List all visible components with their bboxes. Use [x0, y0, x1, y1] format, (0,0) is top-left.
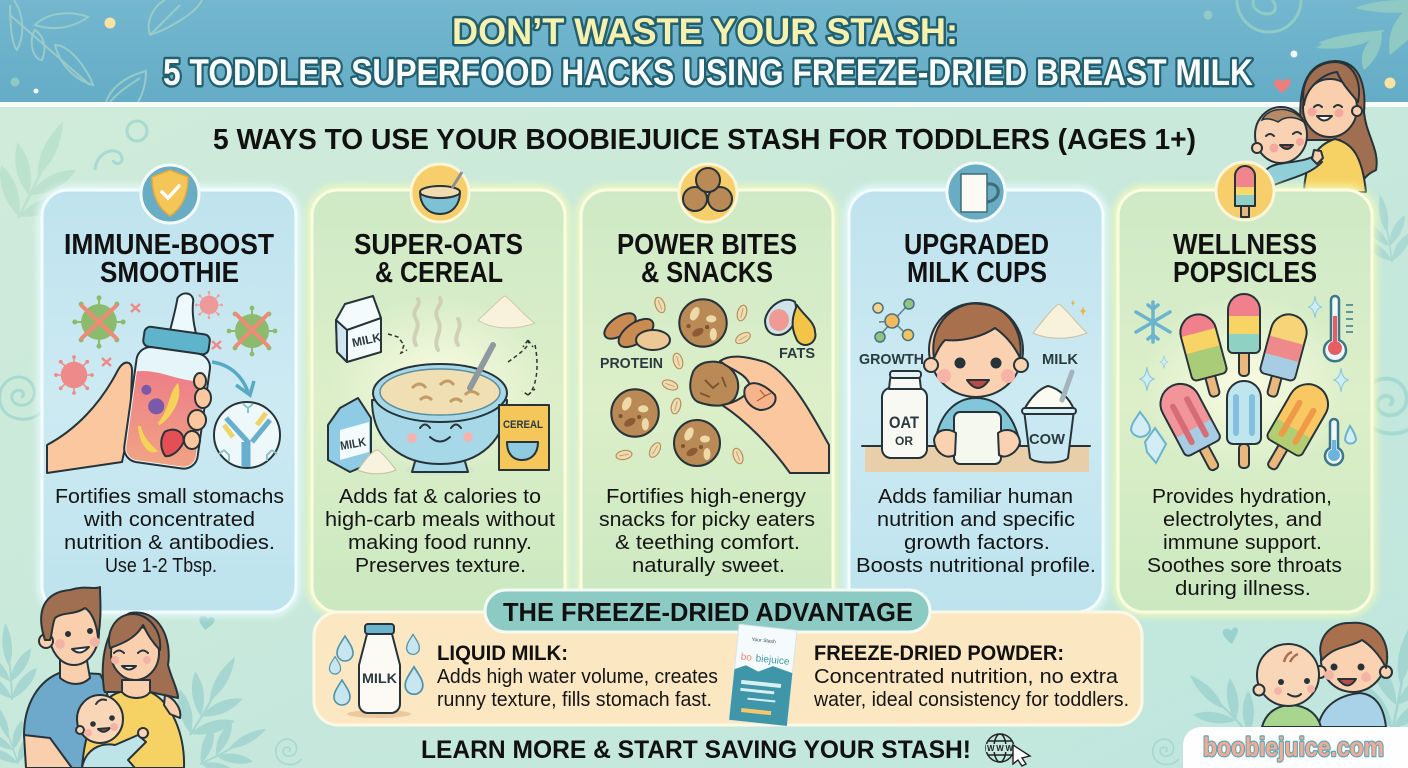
illustration: popsicles: [1131, 294, 1356, 479]
description: Fortifies high-energy: [606, 486, 806, 508]
liquid milk text: [437, 642, 718, 711]
description: Preserves texture.: [355, 555, 526, 577]
icon: shield: [141, 165, 199, 223]
heading: POPSICLES: [1173, 257, 1317, 289]
description: [325, 486, 555, 577]
heading: IMMUNE-BOOST: [64, 229, 274, 261]
heading: [354, 229, 523, 289]
description: electrolytes, and: [1163, 509, 1322, 531]
subheading: 5 WAYS TO USE YOUR BOOBIEJUICE STASH FOR TODDLERS (AGES 1+): [213, 124, 1196, 156]
heading pill: THE FREEZE-DRIED ADVANTAGE: [503, 597, 913, 627]
description: snacks for picky eaters: [599, 509, 815, 531]
icon: oat bowl: [411, 164, 469, 222]
heading: & SNACKS: [641, 257, 773, 289]
panel: power bites and snacks: [581, 164, 833, 612]
description: growth factors.: [904, 532, 1050, 554]
icon: globe with cursor: [986, 734, 1030, 766]
illustration: toddler with milk cup: OR: [895, 434, 913, 448]
description: Adds familiar human: [878, 486, 1073, 508]
product pouch: [729, 624, 797, 726]
product pouch: Your Stash: [751, 637, 776, 645]
panel: upgraded milk cups: [849, 163, 1103, 612]
illustration: toddler with milk cup: OAT: [889, 413, 920, 432]
freeze-dried powder text: FREEZE-DRIED POWDER:: [814, 642, 1064, 665]
icon: milk mug: [947, 163, 1005, 221]
heading: WELLNESS: [1173, 229, 1317, 261]
illustration: power bites: FATS: [779, 345, 815, 362]
illustration: toddler with milk cup: GROWTH: [859, 351, 924, 368]
description: [1147, 486, 1342, 600]
illustration: mother and baby: [1252, 61, 1377, 192]
description: & teething comfort.: [615, 532, 800, 554]
icon: milk bottle: [329, 624, 423, 718]
header banner: [0, 0, 1408, 107]
panel: super-oats and cereal: [312, 164, 565, 612]
heading: POWER BITES: [617, 229, 797, 261]
freeze-dried powder text: water, ideal consistency for toddlers.: [813, 689, 1129, 711]
liquid milk text: runny texture, fills stomach fast.: [437, 689, 712, 711]
description: during illness.: [1175, 578, 1311, 600]
freeze-dried powder text: Concentrated nutrition, no extra: [814, 666, 1119, 688]
description: [856, 486, 1096, 577]
icon: popsicle: [1216, 162, 1274, 220]
description: immune support.: [1163, 532, 1322, 554]
website link: [1183, 727, 1408, 768]
heading: MILK CUPS: [907, 257, 1047, 289]
title line 1: DON’T WASTE YOUR STASH:: [452, 11, 958, 52]
illustration: power bites: PROTEIN: [600, 355, 663, 372]
heading: SUPER-OATS: [354, 229, 523, 261]
description: high-carb meals without: [325, 509, 555, 531]
description: making food runny.: [348, 532, 532, 554]
description: with concentrated: [83, 509, 255, 531]
title line 2: 5 TODDLER SUPERFOOD HACKS USING FREEZE-DRIED BREAST MILK: [163, 52, 1253, 93]
product pouch: biejuice: [755, 653, 790, 668]
icon: globe with cursor: WWW: [987, 744, 1013, 753]
description: [55, 486, 284, 577]
illustration: toddler with milk cup: [859, 299, 1090, 472]
liquid milk text: Adds high water volume, creates: [437, 666, 718, 688]
illustration: toddler with milk cup: COW: [1029, 431, 1066, 448]
illustration: bottle and viruses: [47, 288, 280, 473]
call to action: LEARN MORE & START SAVING YOUR STASH!: [421, 736, 971, 764]
illustration: oat bowl with milk and cereal: MILK: [351, 330, 383, 350]
heading: [64, 229, 274, 289]
heading: [1173, 229, 1317, 289]
illustration: oat bowl with milk and cereal: [328, 296, 549, 476]
icon: energy balls: [679, 164, 737, 222]
heading: & CEREAL: [375, 257, 503, 289]
panel: the freeze-dried advantage: [314, 590, 1142, 726]
illustration: power bites: [600, 296, 829, 473]
description: Use 1-2 Tbsp.: [105, 555, 217, 577]
illustration: oat bowl with milk and cereal: CEREAL: [503, 419, 543, 431]
description: nutrition & antibodies.: [64, 532, 275, 554]
liquid milk text: LIQUID MILK:: [437, 642, 568, 665]
illustration: toddlers: [1254, 623, 1392, 727]
description: Adds fat & calories to: [339, 486, 541, 508]
illustration: oat bowl with milk and cereal: MILK: [339, 435, 367, 453]
illustration: family: [24, 587, 184, 768]
icon: milk bottle: MILK: [362, 670, 397, 686]
description: Boosts nutritional profile.: [856, 555, 1096, 577]
heading pill: [485, 590, 930, 632]
description: [599, 486, 815, 577]
illustration: toddler with milk cup: MILK: [1042, 351, 1078, 368]
description: naturally sweet.: [632, 555, 785, 577]
heading: UPGRADED: [904, 229, 1049, 261]
description: Provides hydration,: [1152, 486, 1332, 508]
freeze-dried powder text: [813, 642, 1129, 711]
product pouch: bo: [740, 652, 753, 664]
panel: immune-boost smoothie: [42, 165, 296, 612]
description: Fortifies small stomachs: [55, 486, 284, 508]
heading: SMOOTHIE: [100, 257, 239, 289]
heading: [617, 229, 797, 289]
description: nutrition and specific: [877, 509, 1075, 531]
panel: wellness popsicles: [1118, 162, 1372, 612]
heading: [904, 229, 1049, 289]
title: [163, 11, 1253, 93]
description: Soothes sore throats: [1147, 555, 1342, 577]
